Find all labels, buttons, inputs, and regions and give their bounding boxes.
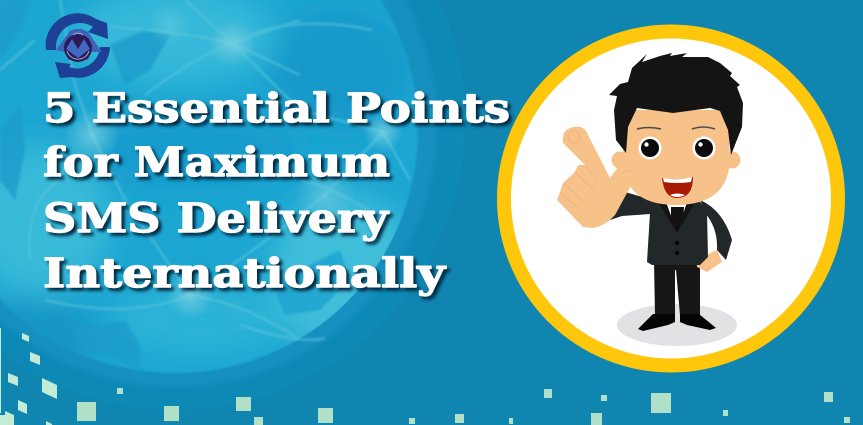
shirt and tie	[665, 200, 688, 232]
title: for Maximum	[43, 139, 390, 186]
title: SMS Delivery	[43, 195, 390, 242]
logo	[46, 13, 110, 78]
mouth	[662, 177, 693, 198]
head	[623, 110, 730, 205]
jacket buttons	[675, 241, 679, 255]
shoes	[638, 314, 716, 331]
title	[43, 85, 510, 297]
title: Internationally	[43, 250, 447, 297]
floor shadow	[617, 304, 737, 346]
trousers	[654, 262, 700, 315]
eyes	[638, 136, 716, 160]
character: businessman	[557, 53, 743, 346]
yellow ring badge	[504, 32, 838, 366]
title: 5 Essential Points	[43, 85, 510, 132]
hand on hip	[696, 250, 722, 272]
pixel squares	[0, 328, 850, 425]
logo: figure	[56, 29, 102, 62]
hair	[609, 53, 743, 155]
eyebrows	[637, 127, 715, 129]
lapels	[658, 199, 696, 233]
right arm	[700, 200, 732, 260]
pointing hand	[557, 127, 640, 228]
globe backdrop	[0, 0, 439, 389]
ears	[612, 152, 740, 168]
left arm	[604, 190, 660, 222]
jacket	[647, 200, 708, 265]
logo: circular arrows	[46, 13, 110, 78]
